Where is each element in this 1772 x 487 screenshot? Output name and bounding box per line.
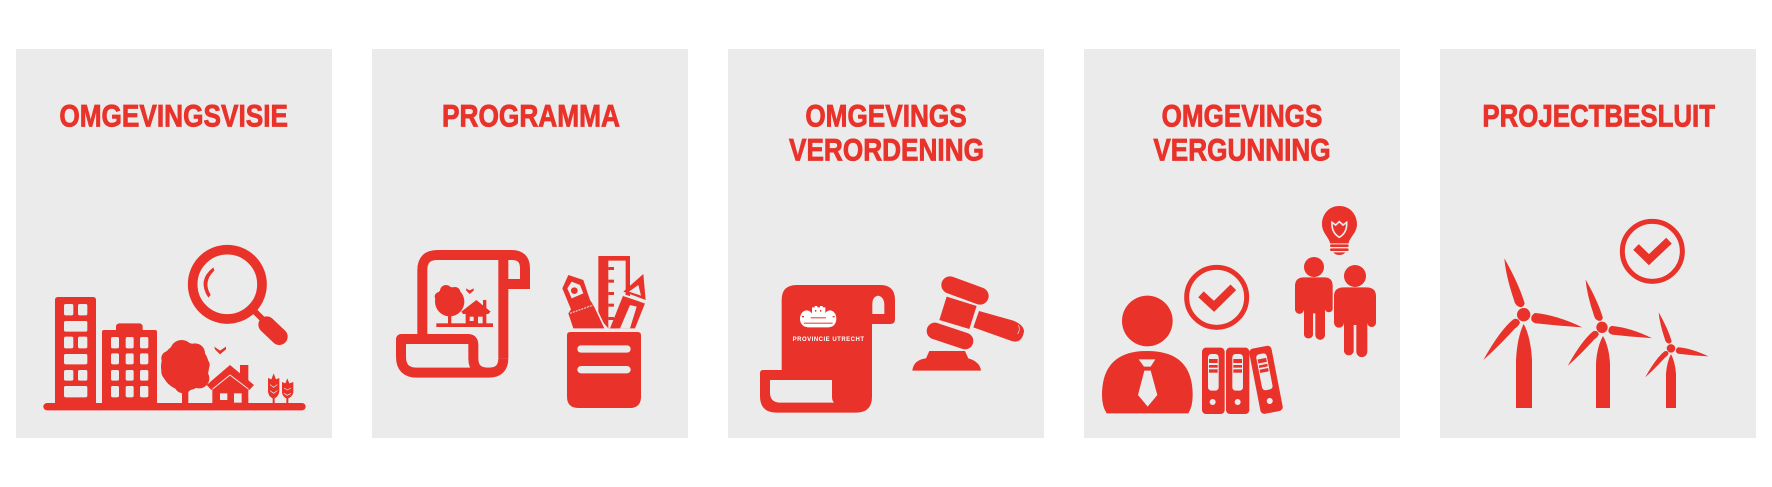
icon: wheat xyxy=(268,373,293,403)
icon: two people xyxy=(1295,257,1376,357)
icon: plan scroll xyxy=(401,255,525,373)
icon: pencil pot xyxy=(562,256,646,408)
ruler xyxy=(598,256,630,328)
plan drawing: tree and house xyxy=(435,285,493,327)
heading: omgevingsverordening: OMGEVINGS xyxy=(805,99,967,134)
icon: binders xyxy=(1202,345,1283,415)
icon: wind turbine small xyxy=(1645,312,1709,408)
icon: approval check xyxy=(1187,267,1247,327)
icon: magnifying glass xyxy=(193,250,279,337)
heading: omgevingsvergunning: OMGEVINGS xyxy=(1162,99,1322,134)
icon: regulation scroll xyxy=(760,285,895,413)
icon: lightbulb xyxy=(1322,206,1357,255)
heading: projectbesluit: PROJECTBESLUIT xyxy=(1482,99,1715,134)
heading: omgevingsvisie: OMGEVINGSVISIE xyxy=(59,99,288,134)
heading line 2: VERORDENING xyxy=(789,132,984,167)
panel: omgevingsvisie xyxy=(16,49,332,438)
icon: wind turbine large xyxy=(1483,258,1582,408)
panel: programma xyxy=(372,49,688,438)
pen xyxy=(562,275,604,328)
icon: official with tie xyxy=(1102,296,1193,413)
panel: omgevingsvergunning xyxy=(1084,49,1400,438)
label: provincie utrecht: PROVINCIE UTRECHT xyxy=(793,337,864,343)
icon: city skyline xyxy=(43,297,306,410)
icon: tree xyxy=(161,340,210,404)
heading: programma: PROGRAMMA xyxy=(442,99,620,134)
icon: house xyxy=(207,347,254,404)
panel: omgevingsverordening xyxy=(728,49,1044,438)
panel: projectbesluit xyxy=(1440,49,1756,438)
icon: wind turbine medium xyxy=(1568,279,1652,408)
icon: approval check xyxy=(1622,221,1682,281)
heading line 2: VERGUNNING xyxy=(1153,132,1331,167)
logo: provincie utrecht crest xyxy=(800,306,836,327)
icon: gavel xyxy=(912,285,1024,371)
pencil xyxy=(610,274,646,328)
